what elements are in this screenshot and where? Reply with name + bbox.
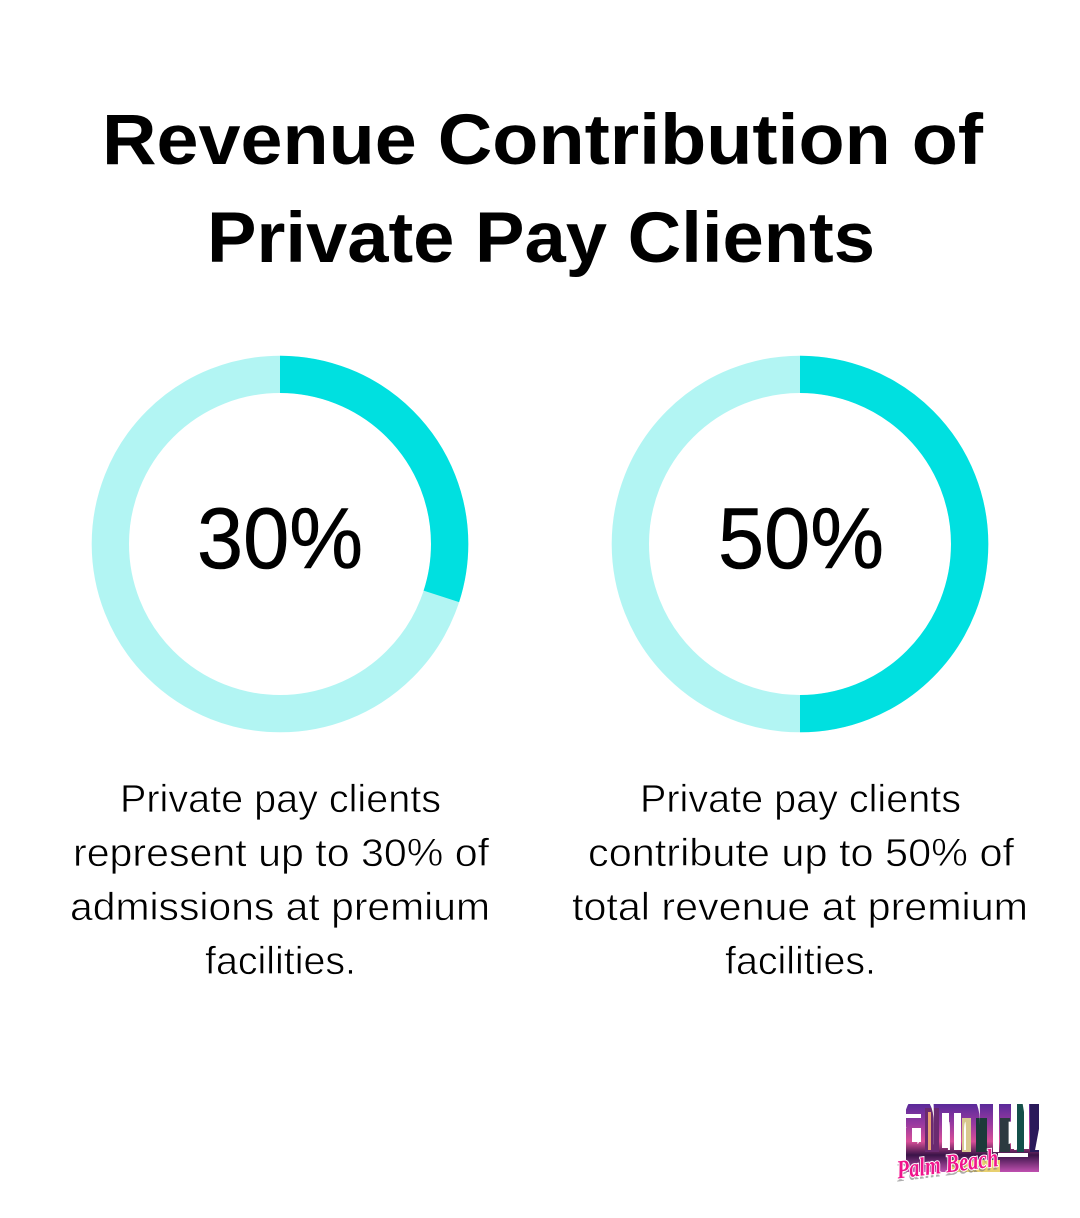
description: revenue: facilities. bbox=[725, 940, 876, 983]
logo letter counters bbox=[906, 1104, 1029, 1157]
description: admissions: Private pay clients bbox=[120, 778, 441, 821]
donut chart: 30% bbox=[110, 374, 450, 714]
logo wordmark with city picture fill bbox=[906, 1104, 1039, 1172]
description: admissions: facilities. bbox=[205, 940, 356, 983]
description: admissions: admissions at premium bbox=[70, 886, 490, 929]
title: Private Pay Clients bbox=[207, 199, 875, 278]
description: revenue: total revenue at premium bbox=[572, 886, 1028, 929]
description: revenue bbox=[572, 778, 1028, 983]
description: admissions: represent up to 30% of bbox=[73, 832, 489, 875]
description: revenue: Private pay clients bbox=[640, 778, 961, 821]
donut chart: 50% bbox=[630, 374, 970, 714]
title bbox=[102, 101, 983, 278]
donut value: 50%: 50% bbox=[718, 491, 884, 587]
logo script: Palm Beach shadow: Palm Beach bbox=[894, 1146, 999, 1188]
donut value: 30%: 30% bbox=[197, 491, 363, 587]
description: admissions bbox=[70, 778, 490, 983]
infographic canvas bbox=[72, 112, 1039, 1182]
description: revenue: contribute up to 50% of bbox=[588, 832, 1014, 875]
panel: 50% of revenue bbox=[572, 374, 1028, 983]
panel: 30% of admissions bbox=[70, 374, 490, 983]
logo: amity Palm Beach bbox=[894, 1104, 1039, 1188]
title: Revenue Contribution of bbox=[102, 101, 983, 180]
logo script: Palm Beach: Palm Beach bbox=[894, 1143, 1000, 1185]
